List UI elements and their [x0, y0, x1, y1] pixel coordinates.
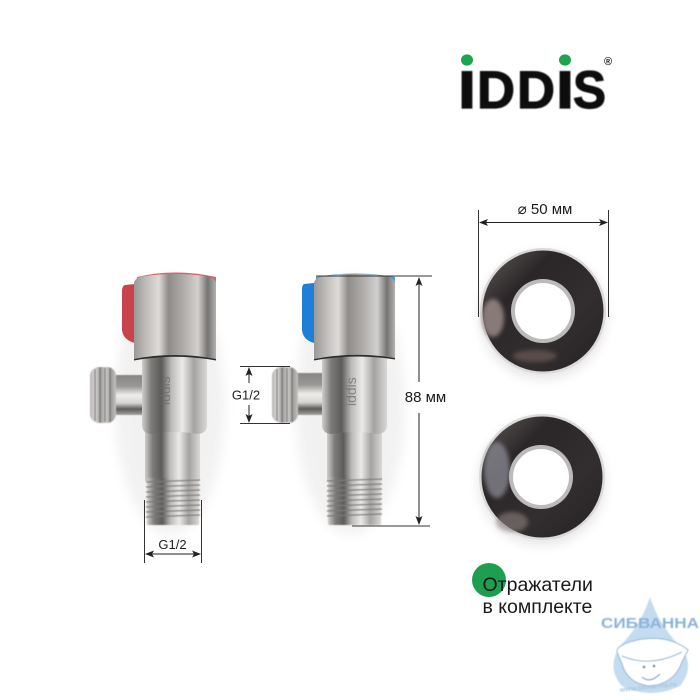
watermark url: www.sibvanna.ru [618, 681, 677, 694]
watermark: Sibvanna [601, 597, 700, 694]
callout: reflectors included [472, 563, 593, 618]
dimension: height 88 mm: 88 мм [405, 389, 446, 406]
callout text: в комплекте [482, 596, 592, 618]
watermark name: СИБВАННА [601, 616, 700, 632]
logo wordmark: D [517, 61, 555, 120]
dimension: height 88 mm [316, 276, 446, 526]
valve body [142, 355, 207, 434]
water drop [613, 597, 688, 693]
valve body [322, 356, 387, 434]
side connector [90, 367, 146, 423]
brand engraving: iddis [343, 377, 359, 406]
logo green dots [461, 54, 571, 66]
logo wordmark: I [556, 61, 574, 120]
logo: IDDIS [458, 54, 612, 120]
steel cap [134, 274, 216, 359]
lower stem [145, 431, 200, 481]
reflector ring bottom [479, 414, 605, 545]
threaded end [327, 477, 382, 525]
dimension: bottom thread G1/2 [144, 500, 202, 563]
bathtub mascot [617, 638, 688, 686]
logo wordmark [458, 61, 606, 120]
registered mark: ® [604, 56, 612, 68]
lower stem [327, 431, 382, 481]
dimension: diameter 50 mm [478, 201, 608, 317]
dimension: side connector G1/2 [232, 366, 290, 424]
side connector [272, 367, 326, 423]
green accent circle [472, 563, 506, 597]
threaded end [146, 478, 200, 525]
blue handle [302, 283, 314, 343]
dimension: side connector G1/2: G1/2 [232, 388, 260, 402]
left valve with red handle [90, 272, 225, 535]
red handle [122, 284, 135, 343]
logo wordmark: I [458, 61, 476, 120]
right valve with blue handle [272, 274, 405, 535]
steel cap [314, 274, 395, 359]
reflector ring top [480, 248, 606, 379]
logo wordmark: S [573, 61, 606, 120]
dimension: bottom thread G1/2: G1/2 [158, 537, 187, 552]
callout text: Отражатели [482, 574, 593, 596]
dimension: diameter 50 mm: ⌀ 50 мм [518, 201, 572, 218]
logo wordmark: D [477, 61, 515, 120]
brand engraving: iddis [157, 376, 173, 405]
